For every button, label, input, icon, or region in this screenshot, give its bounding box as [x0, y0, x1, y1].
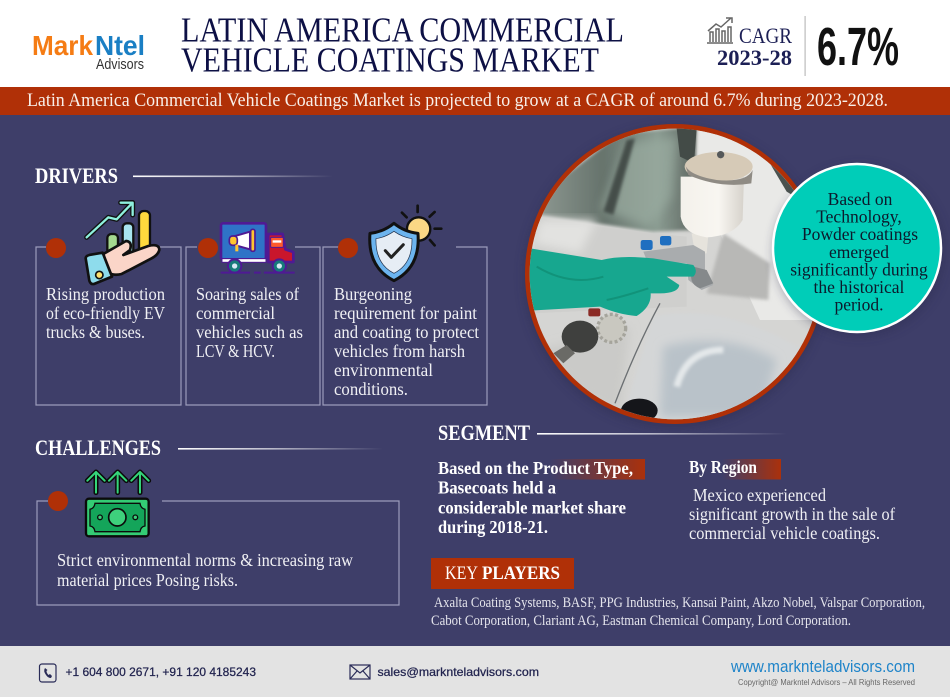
heading: key players: KEY: [445, 563, 478, 584]
text: email: sales@marknteladvisors.com: [378, 665, 539, 679]
logo: Mark: [32, 30, 93, 61]
segment: region: significant growth in the sale of: [689, 504, 895, 524]
logo: [32, 30, 145, 73]
icon: growth chart: [707, 18, 733, 43]
icon: promotional truck: [221, 223, 295, 273]
panel: driver 2: [186, 223, 320, 405]
heading: drivers: DRIVERS: [35, 163, 118, 188]
text: driver 3: environmental: [334, 360, 433, 380]
text: driver 1: Rising production: [46, 284, 165, 304]
summary band: Latin America Commercial Vehicle Coatings Market is projected to grow at a CAGR of around 6.7% during 2023-2028.: [27, 90, 888, 111]
text: website: www.marknteladvisors.com: [730, 658, 915, 676]
CAGR label: CAGR: [739, 23, 792, 48]
green glove: [520, 247, 696, 316]
footer: [0, 646, 950, 697]
segment: region: Mexico experienced: [693, 485, 826, 505]
text: challenges: [57, 550, 353, 590]
icon: money with rising arrows: [86, 472, 149, 536]
segment: product type: [438, 458, 645, 537]
text: driver 2: commercial: [196, 303, 275, 323]
text: driver 3: vehicles from harsh: [334, 341, 465, 361]
title: [181, 10, 624, 80]
callout: technology: Based on: [828, 189, 893, 209]
header: [0, 0, 950, 87]
callout: technology: Technology,: [816, 206, 902, 226]
icon: phone: [40, 664, 56, 682]
text: driver 1: trucks & buses.: [46, 322, 145, 342]
CAGR label: [717, 23, 792, 70]
text: challenges: material prices Posing risks.: [57, 570, 238, 590]
icon: shield with sun: [370, 206, 441, 281]
heading: challenges: CHALLENGES: [35, 435, 161, 460]
callout: technology: emerged: [829, 242, 889, 262]
heading: segment: SEGMENT: [438, 420, 530, 445]
callout: technology: the historical: [814, 277, 905, 297]
icon: hand with rising chart: [86, 203, 159, 284]
text: driver 1: of eco-friendly EV: [46, 303, 165, 323]
logo: Ntel: [95, 30, 145, 61]
panel: driver 1: [36, 203, 181, 405]
text: key players list: [431, 595, 925, 629]
regulator: [553, 308, 626, 363]
text: driver 3: requirement for paint: [334, 303, 477, 323]
title: VEHICLE COATINGS MARKET: [181, 40, 599, 80]
heading: key players: PLAYERS: [482, 563, 560, 584]
panel: driver 3: [323, 206, 487, 405]
icon: envelope: [350, 665, 370, 679]
text: driver 2: LCV & HCV.: [196, 341, 275, 361]
CAGR label: 2023-28: [717, 45, 792, 70]
text: key players list: Cabot Corporation, Clariant AG, Eastman Chemical Company, Lord Corporation.: [431, 613, 851, 629]
text: driver 3: conditions.: [334, 379, 408, 399]
segment: region: By Region: [689, 457, 757, 477]
text: driver 2: Soaring sales of: [196, 284, 299, 304]
callout: technology: [773, 164, 945, 337]
text: phone numbers: +1 604 800 2671, +91 120 4185243: [66, 665, 256, 679]
text: driver 2: vehicles such as: [196, 322, 303, 342]
text: copyright: Copyright@ Markntel Advisors – All Rights Reserved: [738, 678, 915, 687]
CAGR value: 6.7%: [817, 17, 899, 77]
spray gun: [641, 151, 753, 290]
segment: product type: Based on the Product Type,: [438, 458, 633, 478]
callout: technology: period.: [834, 294, 884, 314]
text: driver 3: and coating to protect: [334, 322, 479, 342]
panel: challenges: [37, 472, 399, 605]
segment: product type: during 2018-21.: [438, 517, 548, 537]
heading: key players: [431, 558, 574, 589]
text: driver 1: [46, 284, 165, 342]
segment: region: [689, 457, 895, 543]
logo: Advisors: [96, 57, 144, 73]
segment: region: commercial vehicle coatings.: [689, 523, 880, 543]
text: driver 3: Burgeoning: [334, 284, 412, 304]
callout: technology: Powder coatings: [802, 224, 918, 244]
segment: product type: Basecoats held a: [438, 478, 556, 498]
segment: product type: considerable market share: [438, 498, 626, 518]
photo: spray gun painting a vehicle: [520, 120, 830, 430]
text: driver 3: [334, 284, 479, 399]
callout: technology: significantly during: [790, 260, 928, 280]
text: driver 2: [196, 284, 303, 361]
text: challenges: Strict environmental norms & increasing raw: [57, 550, 353, 570]
title: LATIN AMERICA COMMERCIAL: [181, 10, 624, 50]
